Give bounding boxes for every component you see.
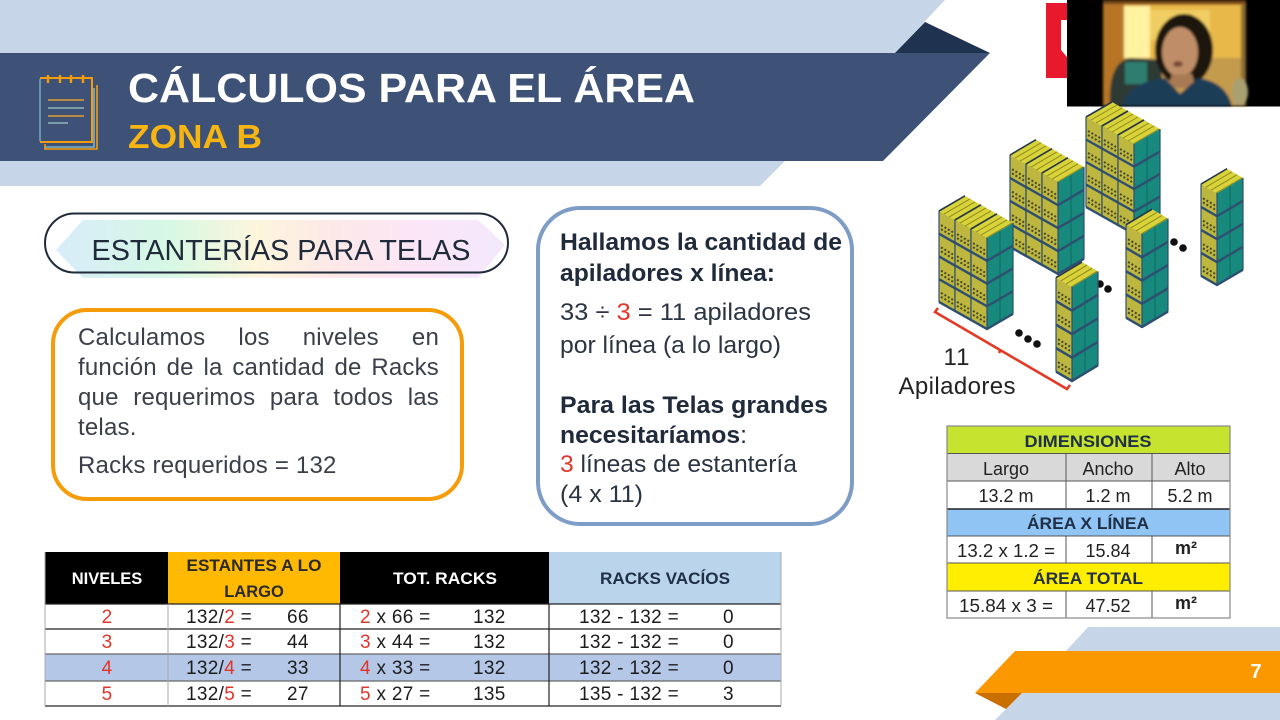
stack far right (1201, 169, 1243, 285)
row 4: 132/4 = (186, 658, 252, 679)
row 2: 2 (102, 607, 112, 628)
row 2 (102, 607, 734, 628)
large fabrics note: necesitaríamos: (560, 422, 747, 449)
orange box text: Racks requeridos = 132 (78, 452, 337, 479)
orange box text: telas. (78, 414, 137, 441)
stack front line end (1056, 262, 1098, 381)
panel heading: estanterias (45, 214, 508, 278)
header light band (0, 0, 945, 53)
row 5: 135 - 132 = (579, 684, 679, 705)
row 2: 132 (473, 607, 506, 628)
dots right (1170, 238, 1187, 252)
row 4: 132 (473, 658, 506, 679)
row 4: 4 (102, 658, 113, 679)
orange box text (78, 324, 439, 479)
stack line back (1086, 102, 1160, 234)
row 3: 132/3 = (186, 632, 252, 653)
row 4: 4 x 33 = (360, 658, 431, 679)
row 4: 33 (287, 658, 309, 679)
blue box heading: apiladores x línea: (560, 260, 775, 287)
total area: 47.52 (1085, 596, 1131, 616)
header lower light band (0, 161, 785, 186)
row 4 (102, 658, 734, 679)
large fabrics note: Para las Telas grandes (560, 392, 828, 419)
dimensions header: DIMENSIONES (1024, 432, 1152, 451)
row 3: 3 x 44 = (360, 632, 431, 653)
row 3: 0 (723, 632, 734, 653)
orange box text: que requerimos para todos las (78, 384, 439, 411)
label 11 apiladores (898, 344, 1016, 400)
footer light shape top (1066, 627, 1280, 651)
table header: TOT. RACKS (393, 570, 497, 588)
dimensions values: Alto (1174, 459, 1206, 479)
row 2: 0 (723, 607, 734, 628)
row 5: 132/5 = (186, 684, 252, 705)
illustration: rack stacks (939, 102, 1243, 381)
area per line: m² (1175, 538, 1197, 558)
stack line middle (1010, 140, 1084, 274)
blue box heading: Hallamos la cantidad de (560, 229, 842, 256)
row 3: 132 (473, 632, 506, 653)
webcam video (1067, 0, 1280, 106)
calculation (560, 299, 811, 359)
table header (45, 552, 781, 604)
panel: blue box (538, 208, 852, 524)
stack line front (939, 196, 1013, 329)
large fabrics note (560, 392, 828, 508)
area per line: ÁREA X LÍNEA (1027, 514, 1149, 533)
title: CÁLCULOS PARA EL ÁREA (128, 65, 695, 111)
dimensions values: Ancho (1082, 459, 1134, 479)
row 3: 3 (102, 632, 112, 653)
row 5 (102, 684, 734, 705)
total area: ÁREA TOTAL (1033, 569, 1143, 588)
orange box text: Calculamos los niveles en (78, 324, 439, 351)
total area (959, 569, 1197, 616)
total area: m² (1175, 593, 1197, 613)
row 3: 44 (287, 632, 309, 653)
row 5: 5 (102, 684, 112, 705)
dimensions values: 5.2 m (1167, 486, 1213, 506)
row 5: 5 x 27 = (360, 684, 431, 705)
row 3 (102, 632, 734, 653)
red bracket (935, 308, 1070, 389)
header fold (895, 22, 990, 53)
panel heading: estanterias: ESTANTERÍAS PARA TELAS (92, 234, 470, 267)
row 2: 2 x 66 = (360, 607, 431, 628)
orange box text: función de la cantidad de Racks (78, 354, 439, 381)
large fabrics note: (4 x 11) (560, 481, 643, 508)
dimensions values: Largo (983, 459, 1029, 479)
page number: 7 (1250, 661, 1262, 683)
footer fold (975, 693, 1022, 709)
row 5: 3 (723, 684, 734, 705)
table: dimensiones (947, 426, 1230, 618)
table header: LARGO (224, 583, 284, 601)
row 5: 135 (473, 684, 506, 705)
blue box heading (560, 229, 842, 287)
calculation: 33 ÷ 3 = 11 apiladores (560, 299, 811, 326)
table header: RACKS VACÍOS (600, 569, 730, 588)
table: niveles (45, 552, 781, 706)
row 4: 0 (723, 658, 734, 679)
table header: ESTANTES A LO (186, 557, 322, 575)
icon: notepad (40, 75, 97, 149)
dots front (1015, 329, 1041, 348)
row 3: 132 - 132 = (579, 632, 679, 653)
label 11 apiladores: Apiladores (898, 373, 1016, 400)
table header: NIVELES (72, 570, 142, 588)
panel: orange box (53, 310, 462, 499)
row 2: 132 - 132 = (579, 607, 679, 628)
row 2: 132/2 = (186, 607, 252, 628)
large fabrics note: 3 líneas de estantería (560, 451, 798, 478)
label 11 apiladores: 11 (944, 344, 970, 371)
dimensions values: 1.2 m (1085, 486, 1131, 506)
area per line: 13.2 x 1.2 = (957, 541, 1055, 561)
area per line (957, 514, 1197, 561)
logo fragment (1046, 3, 1067, 78)
dots middle (1096, 280, 1112, 293)
highlighted row (45, 654, 781, 681)
subtitle: ZONA B (128, 118, 262, 155)
total area: 15.84 x 3 = (959, 596, 1053, 616)
stack right line end (1126, 209, 1168, 327)
row 5: 27 (287, 684, 309, 705)
header band (0, 53, 990, 161)
area per line: 15.84 (1085, 541, 1131, 561)
row 4: 132 - 132 = (579, 658, 679, 679)
row 2: 66 (287, 607, 309, 628)
footer orange band (975, 651, 1280, 693)
dimensions values: 13.2 m (978, 486, 1034, 506)
footer light shape bottom (995, 693, 1280, 720)
calculation: por línea (a lo largo) (560, 332, 781, 359)
dimensions values (978, 459, 1213, 506)
